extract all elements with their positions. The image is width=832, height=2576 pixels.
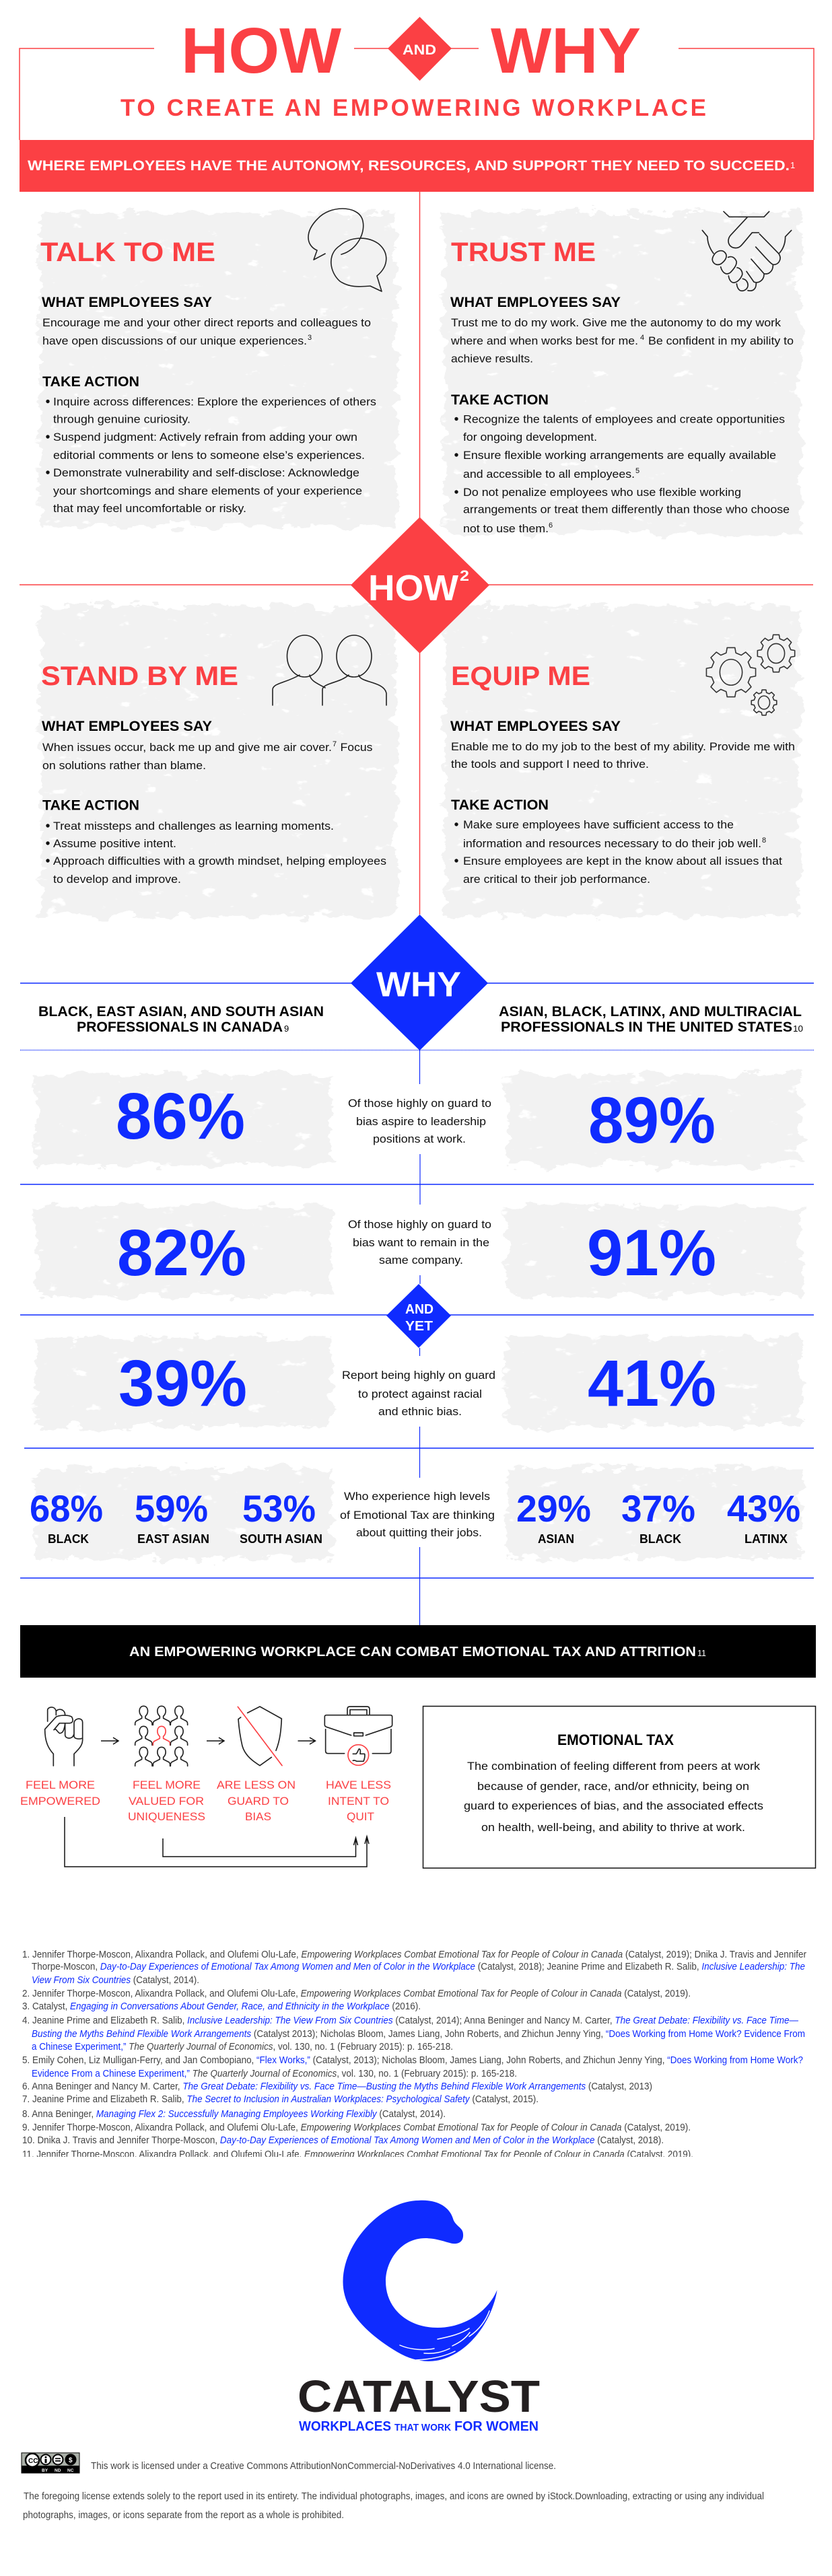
text block: take action: TAKE ACTION	[451, 392, 549, 408]
caption	[348, 1097, 491, 1145]
text block: take action: Treat missteps and challenges as learning moments.	[53, 820, 334, 832]
diamond: HOW: 2	[460, 567, 469, 584]
column heading: united states: PROFESSIONALS IN THE UNITED STATES	[501, 1019, 792, 1035]
caption: Report being highly on guard	[342, 1369, 495, 1382]
footnotes: View From Six Countries (Catalyst, 2014).	[32, 1975, 199, 1986]
caption: and ethnic bias.	[378, 1405, 462, 1418]
icon: briefcase with thumb	[324, 1707, 392, 1765]
text block: take action: for ongoing development.	[463, 431, 597, 443]
disclaimer text: The foregoing license extends solely to the report used in its entirety. The individual photographs, images, and icons are owned by iStock.Downloading, extracting or using any individual	[24, 2491, 764, 2502]
text block: take action: editorial comments or lens to someone else’s experiences.	[53, 449, 365, 462]
text block: take action: 5	[635, 467, 639, 475]
arrow	[101, 1738, 118, 1744]
header frame lines	[20, 48, 814, 140]
footnotes	[13, 1949, 814, 2162]
text block: take action: Ensure flexible working arrangements are equally available	[463, 449, 776, 462]
text block: take action	[42, 798, 386, 886]
text block: take action: through genuine curiosity.	[53, 413, 190, 426]
label: less on guard: ARE LESS ON	[217, 1779, 296, 1791]
caption: about quitting their jobs.	[356, 1526, 482, 1539]
footnotes: 9. Jennifer Thorpe-Moscon, Alixandra Pollack, and Olufemi Olu-Lafe, Empowering Workplaces Combat Emotional Tax for People of Colour in Canada (Catalyst, 2019).	[22, 2122, 691, 2133]
footnotes: 3. Catalyst, Engaging in Conversations About Gender, Race, and Ethnicity in the Workplace (2016).	[22, 2001, 421, 2012]
subtitle: TO CREATE AN EMPOWERING WORKPLACE	[120, 95, 706, 121]
stat: 53% south asian: SOUTH ASIAN	[240, 1532, 322, 1546]
text block: what employees say: have open discussions of our unique experiences.	[42, 334, 307, 347]
black banner	[20, 1625, 816, 1678]
text block: what employees say: WHAT EMPLOYEES SAY	[42, 719, 212, 734]
stat: 68% black: 68%	[30, 1487, 103, 1530]
stat: 68% black: BLACK	[48, 1532, 89, 1546]
stat: 37% black: 37%	[621, 1487, 695, 1530]
title: HOW: HOW	[181, 15, 341, 87]
wordmark: CATALYST	[298, 2371, 540, 2422]
text block: take action: Make sure employees have sufficient access to the	[463, 818, 734, 831]
panel: trust me	[444, 211, 800, 535]
column heading: united states: ASIAN, BLACK, LATINX, AND MULTIRACIAL	[499, 1004, 802, 1019]
stat: 39%: 39%	[118, 1347, 247, 1420]
panel: emotional tax: because of gender, race, and/or ethnicity, being on	[477, 1780, 749, 1793]
text block: what employees say: 3	[308, 334, 312, 342]
horizontal divider red	[20, 584, 813, 585]
heading: stand by me: STAND BY ME	[41, 661, 238, 691]
stat: 43% latinx: LATINX	[744, 1532, 788, 1546]
logo mark: brush C	[343, 2201, 497, 2361]
text block: what employees say: WHAT EMPLOYEES SAY	[450, 719, 621, 734]
label: feel more empowered	[20, 1779, 100, 1808]
footnotes: 11. Jennifer Thorpe-Moscon, Alixandra Pollack, and Olufemi Olu-Lafe, Empowering Workplaces Combat Emotional Tax for People of Colour in Canada (Catalyst, 2019).	[22, 2149, 693, 2160]
column heading: canada	[38, 1004, 324, 1035]
column heading: canada: BLACK, EAST ASIAN, AND SOUTH ASIAN	[38, 1004, 324, 1019]
center divider red	[419, 192, 420, 915]
footnotes: Thorpe-Moscon, Day-to-Day Experiences of Emotional Tax Among Women and Men of Color in the Workplace (Catalyst, 2018); Jeanine Prime and Elizabeth R. Salib, Inclusive Leadership: The	[32, 1962, 805, 1972]
text block: what employees say	[450, 295, 794, 365]
arrow	[298, 1738, 315, 1744]
label: less on guard: GUARD TO	[228, 1795, 289, 1808]
flow diagram	[20, 1706, 392, 1867]
panel: emotional tax	[423, 1707, 816, 1868]
tagline: FOR WOMEN	[454, 2419, 539, 2434]
icon: creative commons badge: ND	[55, 2468, 61, 2473]
label: less intent to quit	[326, 1779, 391, 1823]
text block: take action: not to use them.	[463, 522, 549, 535]
stat: 37% black: BLACK	[639, 1532, 681, 1546]
connector arrow: valued to quit	[163, 1838, 358, 1857]
caption: Of those highly on guard to	[348, 1218, 491, 1231]
diamond: WHY: WHY	[376, 965, 461, 1004]
caption: Who experience high levels	[344, 1490, 490, 1503]
text block: take action: 6	[549, 522, 553, 530]
icon: group of people	[135, 1706, 188, 1766]
stat: 91%: 91%	[587, 1216, 716, 1289]
icon: crossed shield	[238, 1707, 282, 1766]
caption	[342, 1369, 495, 1418]
text block: what employees say	[42, 295, 371, 347]
stat: 59% east asian: EAST ASIAN	[137, 1532, 209, 1546]
label: feel more empowered: FEEL MORE	[26, 1779, 95, 1791]
icon: speech bubbles	[308, 209, 386, 291]
diamond: AND YET: YET	[405, 1319, 433, 1334]
footnotes: 4. Jeanine Prime and Elizabeth R. Salib, Inclusive Leadership: The View From Six Countries (Catalyst, 2014); Anna Beninger and Nancy M. Carter, The Great Debate: Flexibility vs. Face Time—	[22, 2015, 798, 2026]
icon: gears	[706, 635, 795, 715]
diamond: WHY	[351, 915, 488, 1050]
title: WHY: WHY	[491, 15, 641, 87]
text block: what employees say: Focus	[341, 741, 373, 754]
heading: talk to me: TALK TO ME	[40, 238, 215, 267]
text block: what employees say: Be confident in my ability to	[648, 334, 794, 347]
text block: take action: 8	[762, 836, 766, 845]
footnotes: 6. Anna Beninger and Nancy M. Carter, The Great Debate: Flexibility vs. Face Time—Busting the Myths Behind Flexible Work Arrangements (Catalyst, 2013)	[22, 2081, 652, 2092]
text block: take action: Assume positive intent.	[53, 837, 176, 850]
label: feel more valued: UNIQUENESS	[128, 1810, 205, 1823]
row: thinking about quitting	[30, 1468, 801, 1559]
label: less intent to quit: HAVE LESS	[326, 1779, 391, 1791]
diamond: HOW	[351, 517, 489, 653]
text block: what employees say	[42, 719, 373, 772]
text block: what employees say: Enable me to do my job to the best of my ability. Provide me with	[451, 740, 795, 753]
text block: what employees say: 4	[640, 334, 644, 342]
connector arrow: empowered to quit	[65, 1817, 369, 1867]
black banner: 11	[697, 1648, 706, 1658]
text block: what employees say: achieve results.	[451, 353, 533, 365]
caption: Of those highly on guard to	[348, 1097, 491, 1110]
icon: raised fist	[45, 1707, 83, 1766]
text block: take action: Do not penalize employees who use flexible working	[463, 486, 741, 499]
text block: take action	[451, 392, 790, 535]
text block: take action: arrangements or treat them differently than those who choose	[463, 503, 790, 515]
icon: creative commons badge: CC	[28, 2458, 38, 2465]
text block: take action: TAKE ACTION	[451, 797, 549, 813]
diamond: AND YET: AND	[405, 1302, 434, 1317]
panel: emotional tax: on health, well-being, and ability to thrive at work.	[481, 1821, 745, 1834]
label: feel more valued	[128, 1779, 205, 1823]
icon: creative commons badge: NC	[67, 2468, 74, 2473]
text block: take action: Recognize the talents of employees and create opportunities	[463, 413, 785, 426]
footnotes: Busting the Myths Behind Flexible Work Arrangements (Catalyst 2013); Nicholas Bloom, James Liang, John Roberts, and Zhichun Jenny Ying, “Does Working from Home Work? Evidence From	[32, 2029, 805, 2040]
text block: what employees say: Encourage me and your other direct reports and colleagues to	[42, 316, 371, 329]
heading: equip me: EQUIP ME	[451, 661, 590, 691]
column heading: united states	[499, 1004, 803, 1035]
label: feel more empowered: EMPOWERED	[20, 1795, 100, 1808]
text block: take action: Approach difficulties with a growth mindset, helping employees	[53, 855, 386, 867]
column heading: united states: 10	[793, 1024, 803, 1034]
footnotes: 5. Emily Cohen, Liz Mulligan-Ferry, and Jan Combopiano, “Flex Works,” (Catalyst, 2013); Nicholas Bloom, James Liang, John Roberts, and Zhichun Jenny Ying, “Does Working from Home Work?	[22, 2055, 803, 2066]
footnotes: 2. Jennifer Thorpe-Moscon, Alixandra Pollack, and Olufemi Olu-Lafe, Empowering Workplaces Combat Emotional Tax for People of Colour in Canada (Catalyst, 2019).	[22, 1989, 691, 1999]
header	[20, 15, 814, 192]
text block: take action: information and resources necessary to do their job well.	[463, 837, 761, 850]
stat: 82%: 82%	[117, 1216, 246, 1289]
text block: take action: Inquire across differences: Explore the experiences of others	[53, 396, 376, 408]
disclaimer text	[23, 2491, 764, 2521]
label: less intent to quit: QUIT	[347, 1810, 374, 1823]
stat: 86%: 86%	[116, 1079, 245, 1153]
text block: take action: that may feel uncomfortable or risky.	[53, 502, 246, 515]
red band	[20, 140, 814, 192]
heading: trust me: TRUST ME	[451, 238, 596, 267]
arrow	[207, 1738, 224, 1744]
row: aspire to leadership	[36, 1075, 801, 1165]
text block: take action: are critical to their job performance.	[463, 873, 650, 886]
panel: emotional tax: The combination of feeling different from peers at work	[467, 1760, 761, 1773]
disclaimer text: photographs, images, or icons separate from the report as a whole is prohibited.	[23, 2510, 344, 2521]
text block: what employees say: WHAT EMPLOYEES SAY	[450, 295, 621, 310]
why section rules	[20, 983, 814, 1578]
label: less on guard: BIAS	[245, 1810, 271, 1823]
panel: emotional tax: guard to experiences of bias, and the associated effects	[464, 1799, 763, 1812]
panel: talk to me	[40, 209, 396, 526]
tagline: THAT WORK	[394, 2422, 451, 2433]
caption: of Emotional Tax are thinking	[340, 1509, 495, 1522]
license text: This work is licensed under a Creative Commons AttributionNonCommercial-NoDerivatives 4.0 International license.	[91, 2461, 556, 2472]
label: less on guard	[217, 1779, 296, 1823]
text block: what employees say: Trust me to do my work. Give me the autonomy to do my work	[451, 316, 782, 329]
icon: handshake	[702, 211, 792, 291]
tagline	[299, 2419, 539, 2434]
text block: take action: and accessible to all employees.	[463, 468, 635, 480]
stat: 53% south asian	[240, 1487, 322, 1546]
icon: creative commons badge: BY	[42, 2468, 48, 2473]
icon: creative commons badge	[22, 2453, 79, 2473]
label: feel more valued: FEEL MORE	[133, 1779, 201, 1791]
stat: 41%: 41%	[588, 1347, 716, 1420]
caption: same company.	[379, 1254, 463, 1266]
stat: 59% east asian: 59%	[135, 1487, 208, 1530]
icon: creative commons badge: $	[69, 2457, 73, 2464]
tagline: WORKPLACES	[299, 2419, 391, 2434]
red band: WHERE EMPLOYEES HAVE THE AUTONOMY, RESOURCES, AND SUPPORT THEY NEED TO SUCCEED.	[28, 158, 790, 174]
diamond: AND: AND	[403, 42, 436, 58]
icon: two people	[273, 635, 386, 705]
panel: emotional tax: EMOTIONAL TAX	[557, 1731, 674, 1748]
caption: to protect against racial	[358, 1388, 482, 1400]
footnotes: a Chinese Experiment,” The Quarterly Journal of Economics, vol. 130, no. 1 (February 2015): p. 165-218.	[32, 2042, 453, 2052]
row: highly on guard	[36, 1337, 801, 1426]
footnotes: 1. Jennifer Thorpe-Moscon, Alixandra Pollack, and Olufemi Olu-Lafe, Empowering Workplaces Combat Emotional Tax for People of Colour in Canada (Catalyst, 2019); Dnika J. Travis and Jennifer	[22, 1949, 806, 1960]
stat: 43% latinx: 43%	[727, 1487, 800, 1530]
footnotes: 10. Dnika J. Travis and Jennifer Thorpe-Moscon, Day-to-Day Experiences of Emotional Tax Among Women and Men of Color in the Workplace (Catalyst, 2018).	[22, 2135, 664, 2146]
stat: 29% asian: 29%	[516, 1487, 591, 1530]
label: less intent to quit: INTENT TO	[328, 1795, 389, 1808]
text block: take action	[451, 797, 782, 886]
text block: take action: to develop and improve.	[53, 873, 181, 886]
label: feel more valued: VALUED FOR	[129, 1795, 204, 1808]
stat: 89%: 89%	[588, 1083, 716, 1157]
column heading: canada: 9	[284, 1024, 289, 1034]
text block: what employees say: When issues occur, back me up and give me air cover.	[42, 741, 332, 754]
text block: take action: Ensure employees are kept in the know about all issues that	[463, 855, 782, 867]
diamond: HOW: HOW	[368, 568, 458, 608]
black banner: AN EMPOWERING WORKPLACE CAN COMBAT EMOTIONAL TAX AND ATTRITION	[129, 1645, 696, 1659]
column heading: canada: PROFESSIONALS IN CANADA	[77, 1019, 283, 1035]
footnotes: 8. Anna Beninger, Managing Flex 2: Successfully Managing Employees Working Flexibly (Catalyst, 2014).	[22, 2109, 446, 2120]
text block: what employees say	[450, 719, 795, 771]
caption	[348, 1218, 491, 1266]
caption: bias want to remain in the	[353, 1236, 489, 1249]
stat: 53% south asian: 53%	[242, 1487, 316, 1530]
stat: 29% asian: ASIAN	[538, 1532, 574, 1546]
text block: what employees say: 7	[333, 740, 337, 748]
diamond: AND	[388, 17, 452, 81]
red band: 1	[790, 160, 795, 170]
text block: take action: TAKE ACTION	[42, 374, 139, 390]
text block: what employees say: on solutions rather than blame.	[42, 759, 206, 772]
caption: bias aspire to leadership	[356, 1115, 486, 1128]
text block: take action: TAKE ACTION	[42, 798, 139, 814]
row: remain in company	[36, 1206, 801, 1296]
caption	[340, 1490, 495, 1539]
text block: take action: Suspend judgment: Actively refrain from adding your own	[53, 431, 357, 443]
text block: take action: your shortcomings and share elements of your experience	[53, 485, 362, 497]
logo: catalyst	[298, 2201, 540, 2434]
panel: equip me	[444, 606, 800, 917]
text block: take action	[42, 374, 376, 515]
diamond: AND YET	[386, 1284, 451, 1348]
caption: positions at work.	[373, 1133, 466, 1145]
text block: what employees say: where and when works best for me.	[450, 334, 638, 347]
panel: stand by me	[40, 606, 396, 917]
text block: what employees say: the tools and support I need to thrive.	[451, 758, 649, 771]
text block: what employees say: WHAT EMPLOYEES SAY	[42, 295, 212, 310]
footnotes: Evidence From a Chinese Experiment,” The Quarterly Journal of Economics, vol. 130, no. 1 (February 2015): p. 165-218.	[32, 2069, 517, 2079]
text block: take action: Demonstrate vulnerability and self-disclose: Acknowledge	[53, 466, 359, 479]
footnotes: 7. Jeanine Prime and Elizabeth R. Salib, The Secret to Inclusion in Australian Workplaces: Psychological Safety (Catalyst, 2015).	[22, 2094, 539, 2105]
